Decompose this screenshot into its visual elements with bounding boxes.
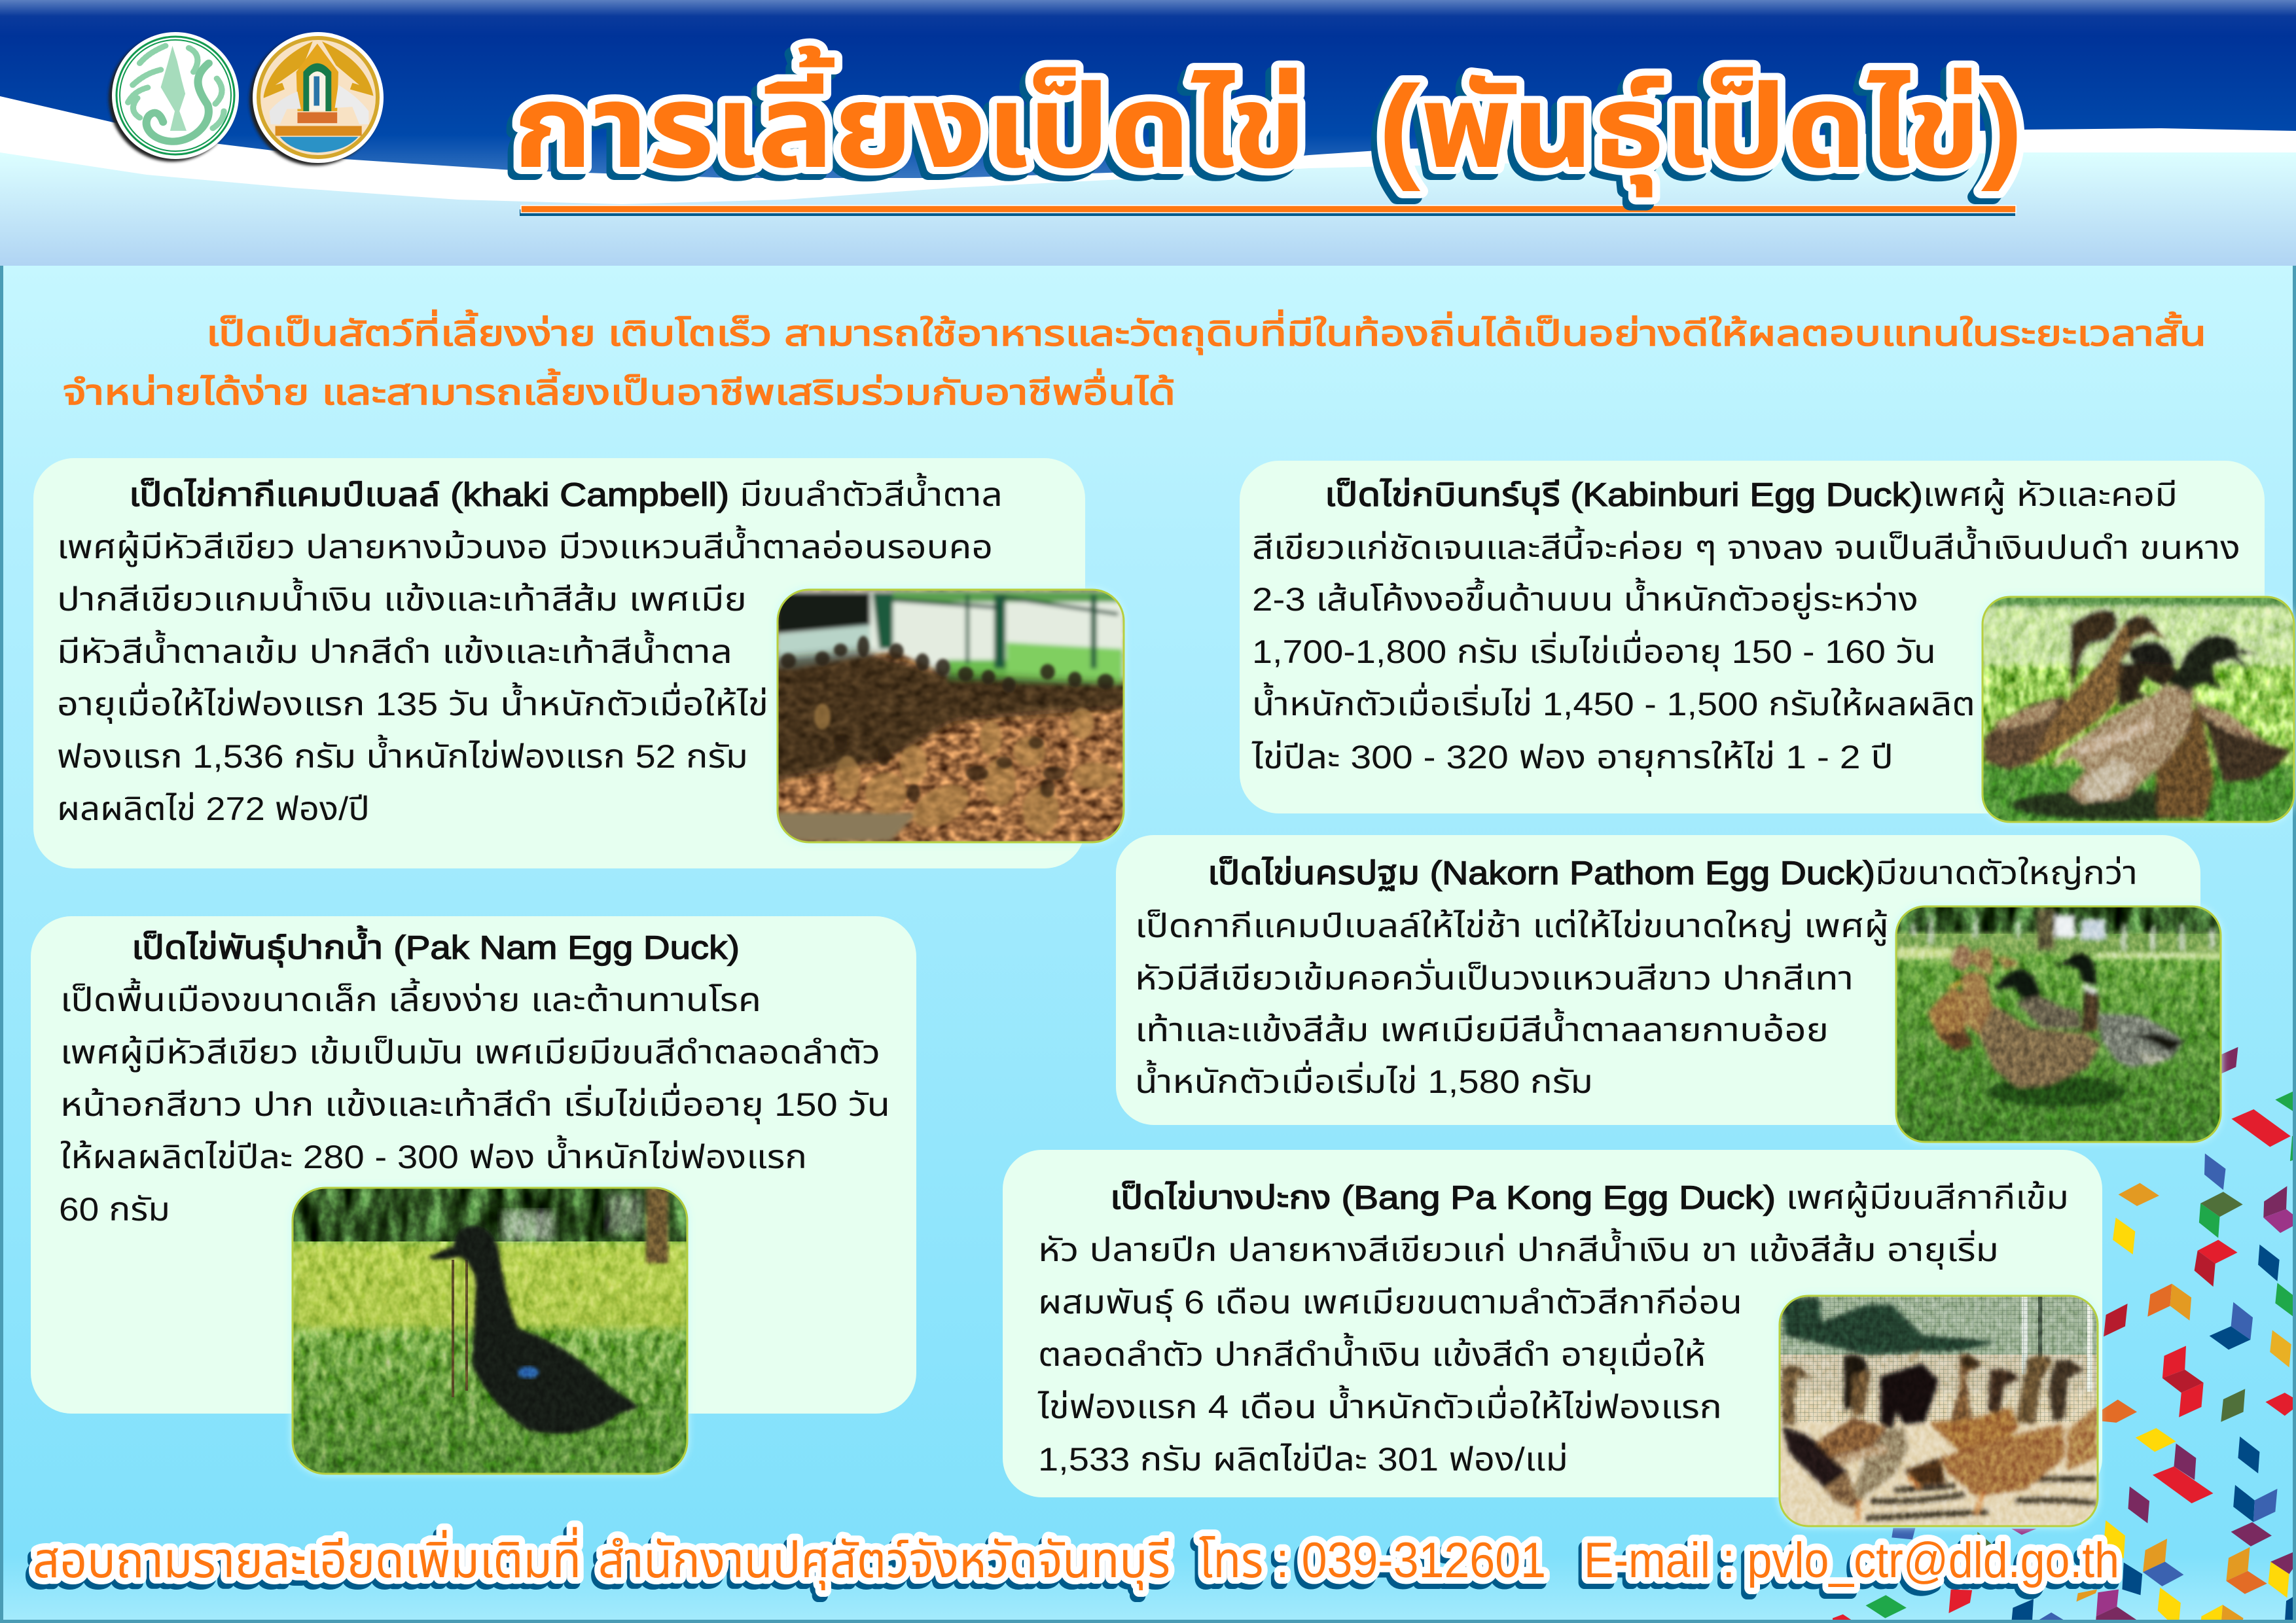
photo: Khaki Campbell flock in pen xyxy=(768,590,1127,842)
description: อายุเมื่อให้ไข่ฟองแรก 135 วัน น้ำหนักตัวเมื่อให้ไข่ xyxy=(57,682,768,724)
photo: Bang Pa Kong ducks behind wire mesh xyxy=(1780,1296,2098,1527)
description: เป็ดพื้นเมืองขนาดเล็ก เลี้ยงง่าย และต้านทานโรค xyxy=(60,978,761,1018)
description: 60 กรัม xyxy=(59,1191,170,1228)
footer contact line: โทร : 039-312601 xyxy=(1199,1533,1546,1588)
description: เป็ดกากีแคมป์เบลล์ให้ไข่ช้า แต่ให้ไข่ขนาดใหญ่ เพศผู้ xyxy=(1135,908,1889,946)
panel: Khaki Campbell duck xyxy=(33,458,1127,868)
description: ผสมพันธุ์ 6 เดือน เพศเมียขนตามลำตัวสีกากีอ่อน xyxy=(1038,1284,1742,1322)
description xyxy=(59,978,890,1228)
card background xyxy=(33,458,1085,868)
description: ผลผลิตไข่ 272 ฟอง/ปี xyxy=(57,791,370,827)
description: หน้าอกสีขาว ปาก แข้งและเท้าสีดำ เริ่มไข่เมื่ออายุ 150 วัน xyxy=(60,1082,890,1124)
description: ฟองแรก 1,536 กรัม น้ำหนักไข่ฟองแรก 52 กรัม xyxy=(57,734,748,775)
panel: Kabinburi egg duck xyxy=(1240,461,2295,823)
description: สีเขียวแก่ชัดเจนและสีนี้จะค่อย ๆ จางลง จนเป็นสีน้ำเงินปนดำ ขนหาง xyxy=(1252,526,2240,566)
heading line: เป็ดไข่บางปะกง (Bang Pa Kong Egg Duck) เพศผู้มีขนสีกากีเข้ม xyxy=(1110,1179,2069,1217)
heading line: เป็ดไข่พันธุ์ปากน้ำ (Pak Nam Egg Duck) xyxy=(132,925,740,967)
footer contact line: สอบถามรายละเอียดเพิ่มเติมที่ xyxy=(33,1527,581,1588)
description: เพศผู้มีหัวสีเขียว ปลายหางม้วนงอ มีวงแหวนสีน้ำตาลอ่อนรอบคอ xyxy=(57,525,993,567)
description: ให้ผลผลิตไข่ปีละ 280 - 300 ฟอง น้ำหนักไข่ฟองแรก xyxy=(60,1135,807,1175)
header banner xyxy=(0,0,2296,266)
heading line: เป็ดไข่นครปฐม (Nakorn Pathom Egg Duck) มีขนาดตัวใหญ่กว่า xyxy=(1208,855,2138,891)
description xyxy=(1037,1228,1999,1478)
intro paragraph: จำหน่ายได้ง่าย และสามารถเลี้ยงเป็นอาชีพเสริมร่วมกับอาชีพอื่นได้ xyxy=(63,368,1175,412)
description: ปากสีเขียวแกมน้ำเงิน แข้งและเท้าสีส้ม เพศเมีย xyxy=(57,577,747,618)
description xyxy=(57,525,993,827)
description: น้ำหนักตัวเมื่อเริ่มไข่ 1,580 กรัม xyxy=(1135,1060,1593,1100)
footer contact line: E-mail : pvlo_ctr@dld.go.th xyxy=(1584,1533,2119,1588)
photo: Kabinburi ducks on grass xyxy=(1981,596,2295,823)
card background xyxy=(31,916,916,1414)
title underline xyxy=(520,205,2016,216)
description: หัวมีสีเขียวเข้มคอควั่นเป็นวงแหวนสีขาว ปากสีเทา xyxy=(1135,958,1854,997)
header light lower band xyxy=(0,0,2296,266)
title: การเลี้ยงเป็ดไข่ xyxy=(513,45,1306,192)
description: หัว ปลายปีก ปลายหางสีเขียวแก่ ปากสีน้ำเงิน ขา แข้งสีส้ม อายุเริ่ม xyxy=(1038,1228,1999,1270)
white wave xyxy=(0,0,2296,204)
heading line: เป็ดไข่กบินทร์บุรี (Kabinburi Egg Duck) เพศผู้ หัวและคอมี xyxy=(1325,476,2178,514)
description: ตลอดลำตัว ปากสีดำน้ำเงิน แข้งสีดำ อายุเมื่อให้ xyxy=(1038,1332,1706,1374)
description xyxy=(1251,526,2240,777)
description: เท้าและแข้งสีส้ม เพศเมียมีสีน้ำตาลลายกาบอ้อย xyxy=(1135,1008,1829,1048)
card background xyxy=(1116,835,2200,1125)
title: (พันธุ์เป็ดไข่) xyxy=(1378,62,2023,198)
intro paragraph xyxy=(63,310,2206,412)
panel: Pak Nam egg duck xyxy=(31,916,916,1474)
description: 1,533 กรัม ผลิตไข่ปีละ 301 ฟอง/แม่ xyxy=(1038,1441,1568,1478)
emblem: green department seal xyxy=(109,32,239,162)
emblem: provincial seal xyxy=(249,32,384,166)
photo: black Pak Nam duck xyxy=(293,1188,687,1474)
description: น้ำหนักตัวเมื่อเริ่มไข่ 1,450 - 1,500 กรัมให้ผลผลิต xyxy=(1252,682,1975,722)
card background xyxy=(1240,461,2265,813)
footer contact line xyxy=(33,1527,2119,1590)
footer contact line: สำนักงานปศุสัตว์จังหวัดจันทบุรี xyxy=(598,1533,1170,1590)
card background xyxy=(1003,1150,2102,1497)
decorative colour mosaic xyxy=(1833,1047,2296,1623)
description: 2-3 เส้นโค้งงอขึ้นด้านบน น้ำหนักตัวอยู่ระหว่าง xyxy=(1252,577,1918,619)
description: 1,700-1,800 กรัม เริ่มไข่เมื่ออายุ 150 - 160 วัน xyxy=(1252,630,1936,671)
title xyxy=(513,45,2023,198)
description: ไข่ฟองแรก 4 เดือน น้ำหนักตัวเมื่อให้ไข่ฟองแรก xyxy=(1037,1385,1722,1425)
panel: Bang Pa Kong egg duck xyxy=(1003,1150,2102,1527)
photo: Nakorn Pathom ducks xyxy=(1896,906,2221,1142)
description: เพศผู้มีหัวสีเขียว เข้มเป็นมัน เพศเมียมีขนสีดำตลอดลำตัว xyxy=(60,1034,880,1072)
dark blue sky xyxy=(0,0,2296,178)
description xyxy=(1135,908,1889,1100)
description: ไข่ปีละ 300 - 320 ฟอง อายุการให้ไข่ 1 - 2 ปี xyxy=(1251,739,1893,777)
intro paragraph: เป็ดเป็นสัตว์ที่เลี้ยงง่าย เติบโตเร็ว สามารถใช้อาหารและวัตถุดิบที่มีในท้องถิ่นได้เป็นอย่างดีให้ผลตอบแทนในระยะเวลาสั้น xyxy=(206,310,2206,355)
heading line: เป็ดไข่กากีแคมป์เบลล์ (khaki Campbell) มีขนลำตัวสีน้ำตาล xyxy=(129,473,1003,513)
panel: Nakorn Pathom egg duck xyxy=(1116,835,2221,1142)
description: มีหัวสีน้ำตาลเข้ม ปากสีดำ แข้งและเท้าสีน้ำตาล xyxy=(57,630,732,670)
